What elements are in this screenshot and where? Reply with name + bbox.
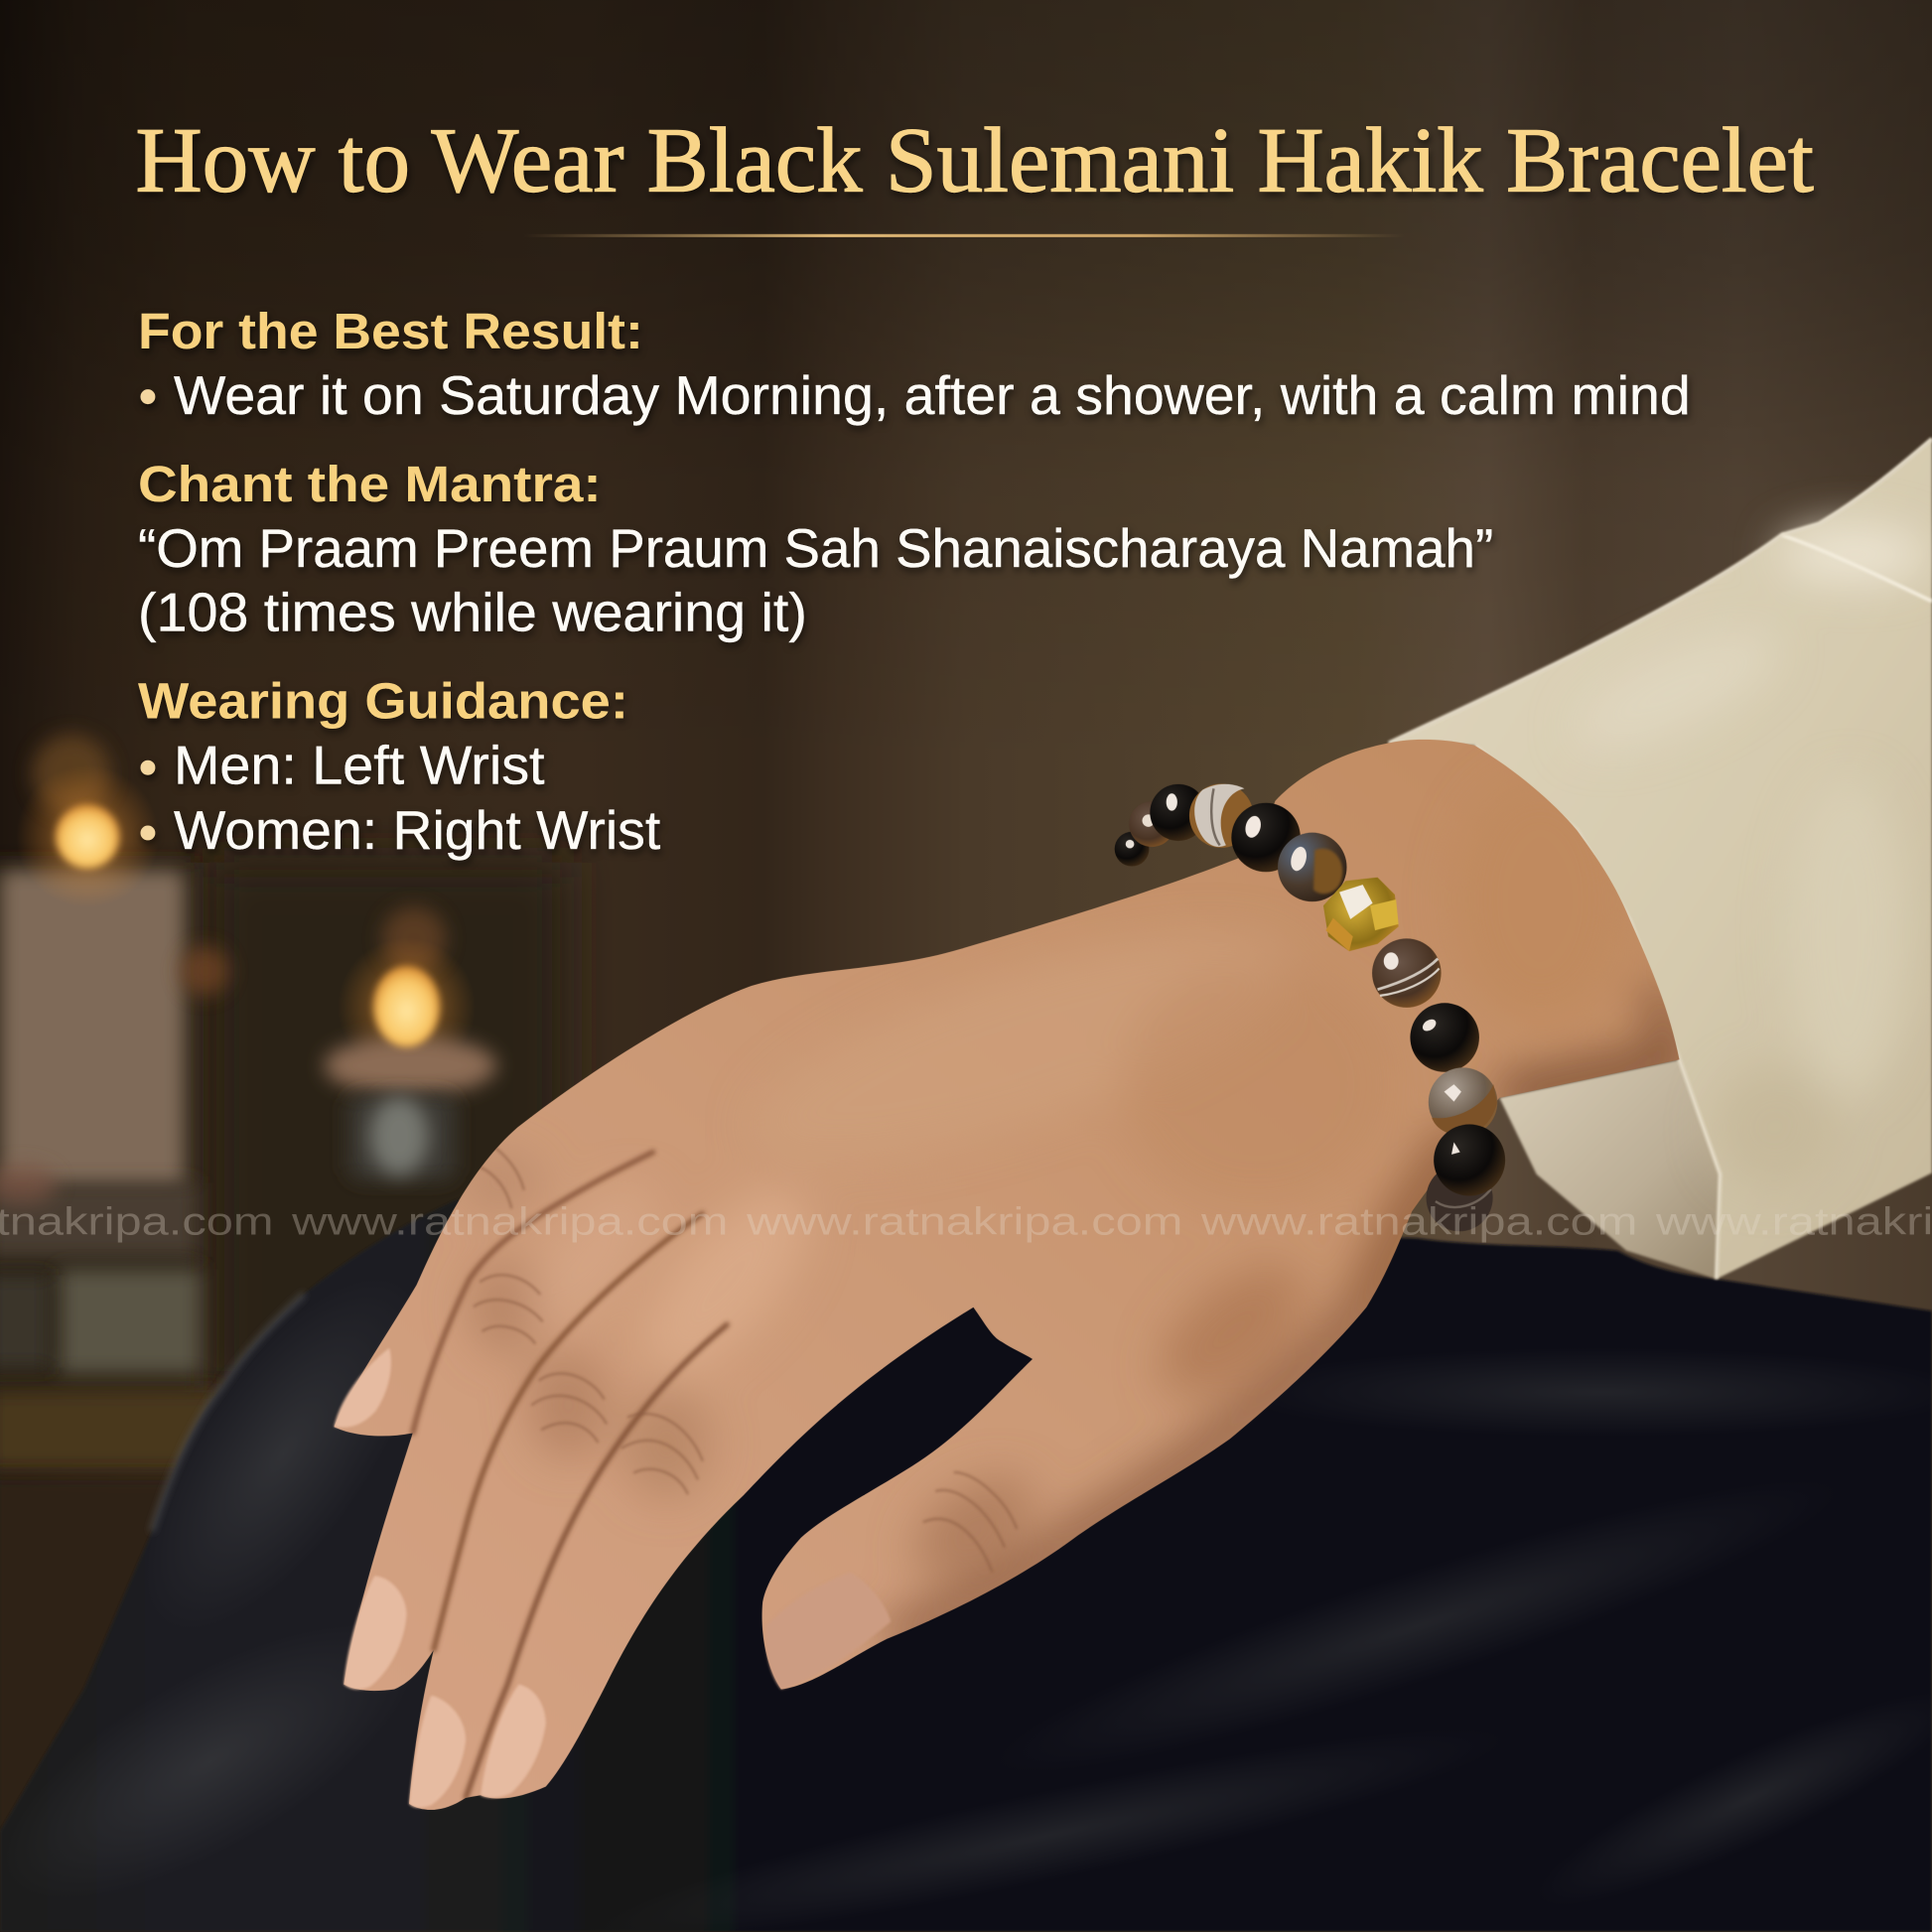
section: wearing guidance [138,673,660,861]
section: wearing guidance: Women: Right Wrist [174,800,660,861]
bead: banded white and amber [1189,783,1253,848]
bead: far brown [1129,801,1174,847]
hand with fingers and thumb [308,715,1701,1824]
nails [334,1348,891,1808]
candles on the left [0,735,567,1932]
Sulemani hakik bead bracelet [1115,783,1505,1231]
section: mantra: (108 times while wearing it) [138,582,807,642]
bead: banded brown [1372,938,1442,1008]
bead: grey banded [1429,1067,1497,1137]
bead: black [1150,784,1206,841]
section: best result: Wear it on Saturday Morning, after a shower, with a calm mind [174,365,1691,426]
section: mantra: Chant the Mantra: [138,456,602,512]
white satin sleeve and cuff [1389,439,1932,1279]
section: mantra: “Om Praam Preem Praum Sah Shanaischaraya Namah” [138,518,1493,579]
watermark strip: www.ratnakripa.com [291,1201,728,1244]
bead: far black [1115,832,1149,866]
text block: instructions [138,303,1691,861]
title: How to Wear Black Sulemani Hakik Bracelet [136,109,1814,211]
black satin fabric [0,1200,1932,1932]
section: best result [138,303,1691,426]
bead: black [1410,1003,1479,1072]
bead: blue tiger eye [1278,833,1346,901]
section: wearing guidance: Wearing Guidance: [138,673,628,730]
watermark strip [0,1201,1932,1244]
bead: lower black [1434,1124,1505,1195]
section: wearing guidance: Men: Left Wrist [174,735,545,795]
section: mantra [138,456,1493,642]
watermark strip: www.ratnakripa.com [746,1201,1182,1244]
bead: lower banded [1427,1165,1493,1231]
bead: glossy black [1231,803,1301,872]
bead: faceted gold [1323,878,1399,951]
title rule [523,234,1405,237]
section: best result: For the Best Result: [138,303,643,359]
watermark strip: www.ratnakripa.com [1200,1201,1637,1244]
